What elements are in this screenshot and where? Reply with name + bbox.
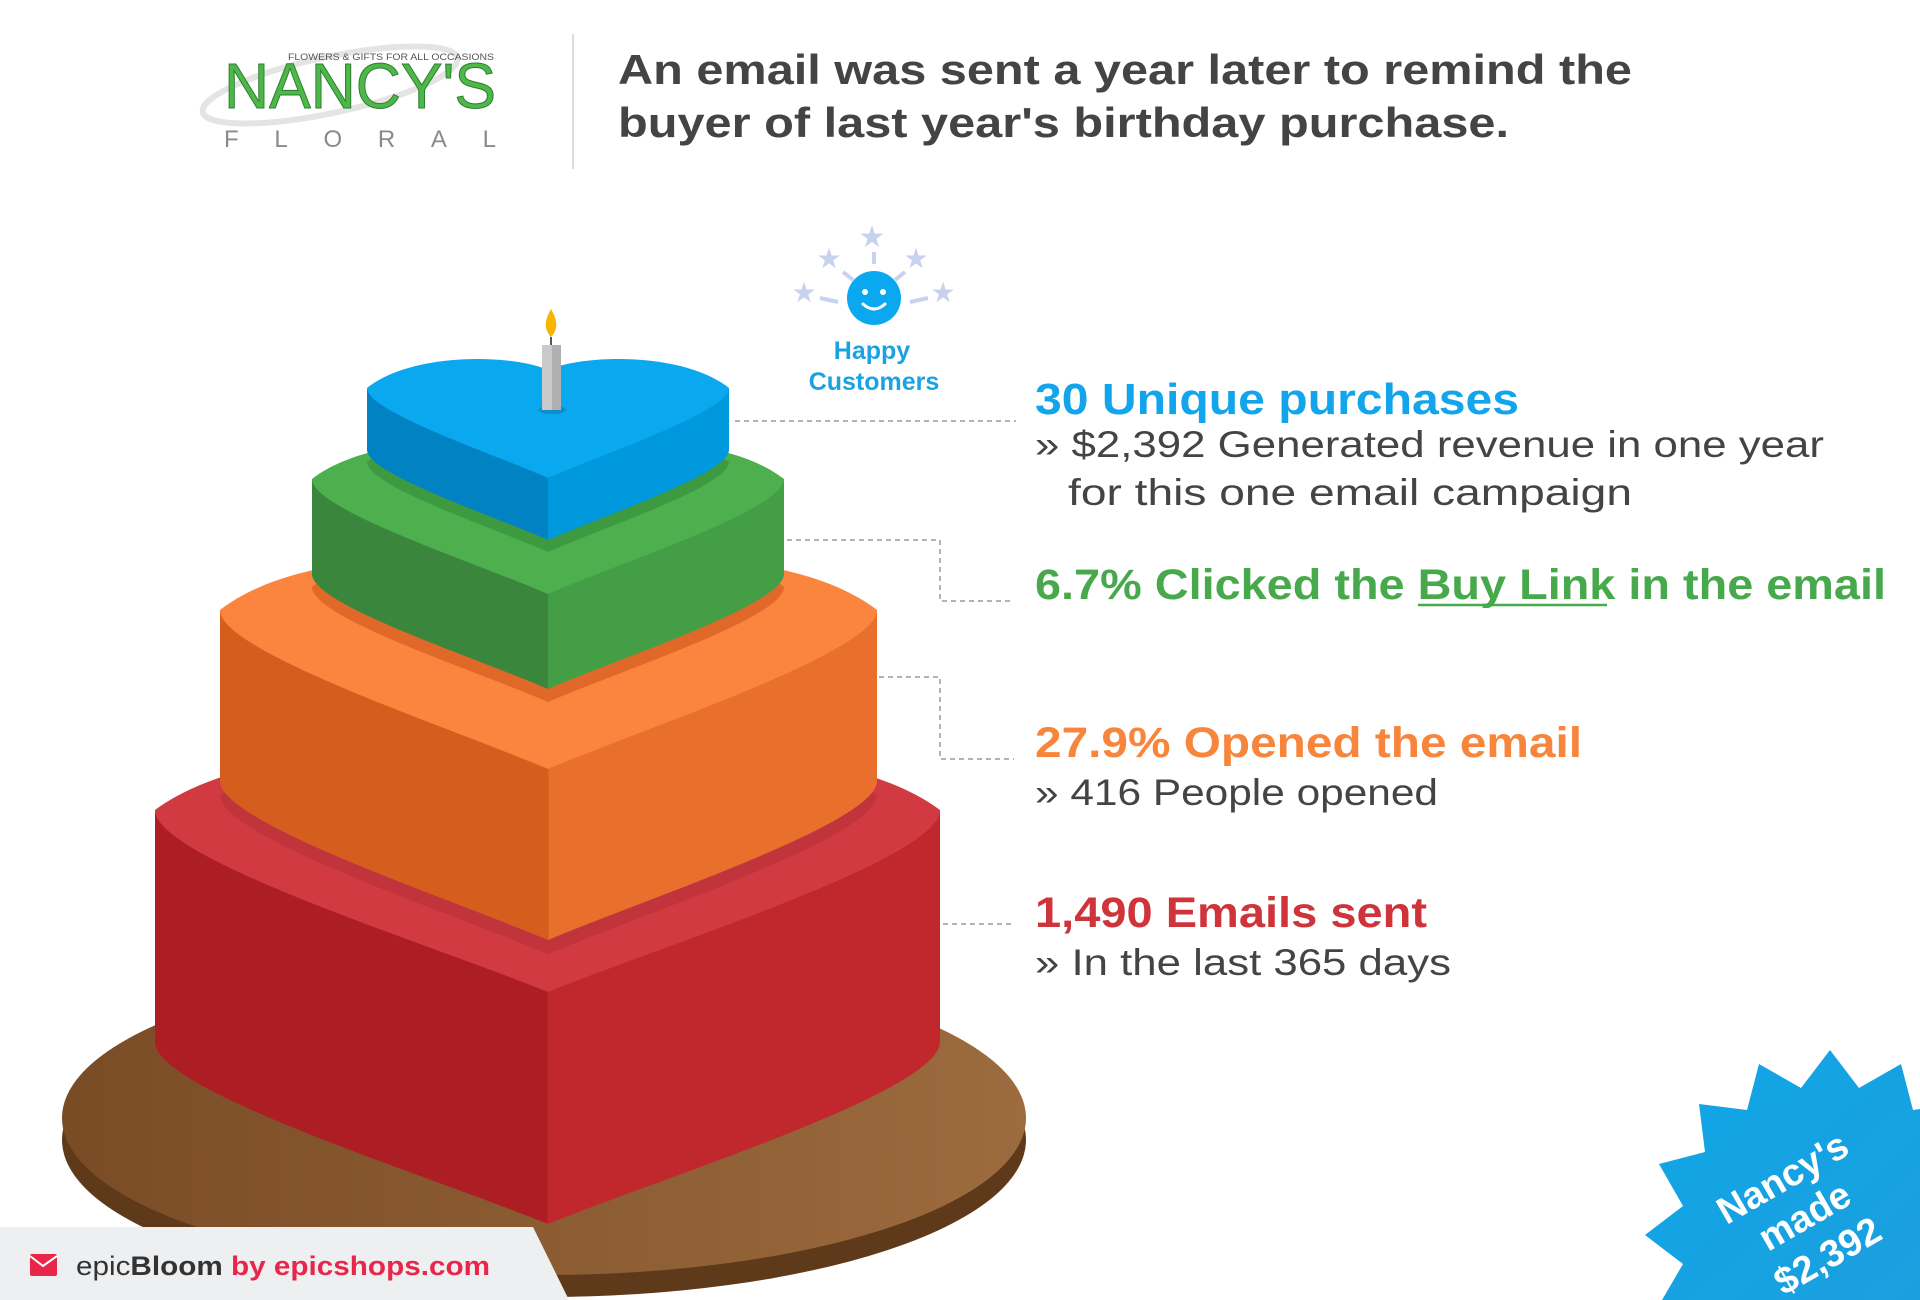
badge: Nancy's made $2,392: [1645, 1050, 1920, 1300]
icon: candle: [538, 309, 566, 414]
text block: emails sent: » In the last 365 days: [1035, 942, 1451, 983]
title: buyer of last year's birthday purchase.: [618, 99, 1509, 146]
connector lines: [735, 421, 1016, 924]
icon: happy customers: ★: [859, 221, 885, 254]
cake tier: orange (opened): [220, 559, 877, 954]
cake tier: blue (purchases): [367, 359, 729, 552]
icon: happy customers: ★: [930, 277, 956, 308]
title: [618, 46, 1632, 146]
cake tier: red (emails sent): [155, 752, 940, 1224]
badge: Nancy's made $2,392: Nancy's: [1710, 1124, 1856, 1233]
icon: happy customers: ★: [791, 277, 817, 308]
text block: emails sent: [1035, 889, 1451, 983]
text block: opened: [1035, 719, 1582, 813]
footer: epicBloom branding: [0, 1227, 569, 1300]
text block: emails sent: 1,490 Emails sent: [1035, 889, 1427, 937]
text block: clicked: 6.7% Clicked the Buy Link in the email: [1035, 561, 1886, 609]
text block: opened: » 416 People opened: [1035, 772, 1438, 813]
text block: purchases: » $2,392 Generated revenue in one year: [1035, 424, 1824, 465]
icon: happy customers: ★: [903, 243, 929, 274]
logo: Nancy's Floral: FLORAL: [224, 126, 496, 153]
cake plate: [62, 961, 1026, 1297]
icon: happy customers: ★: [816, 243, 842, 274]
logo: Nancy's Floral: FLOWERS & GIFTS FOR ALL OCCASIONS: [288, 52, 494, 62]
text block: opened: 27.9% Opened the email: [1035, 719, 1582, 767]
title: An email was sent a year later to remind the: [618, 46, 1632, 93]
badge: Nancy's made $2,392: made: [1752, 1174, 1858, 1260]
footer: epicBloom branding: epicBloom by epicshops.com: [76, 1251, 490, 1281]
icon: happy customers: Customers: [809, 368, 939, 396]
text block: purchases: [1035, 375, 1824, 513]
icon: happy customers: Happy: [834, 337, 910, 365]
logo: Nancy's Floral: NANCY'S: [224, 50, 496, 122]
icon: happy customers: [791, 221, 956, 396]
text block: purchases: 30 Unique purchases: [1035, 375, 1519, 424]
cake tier: green (clicked): [312, 442, 784, 702]
text block: purchases: for this one email campaign: [1068, 472, 1632, 513]
logo: Nancy's Floral: [197, 31, 496, 153]
